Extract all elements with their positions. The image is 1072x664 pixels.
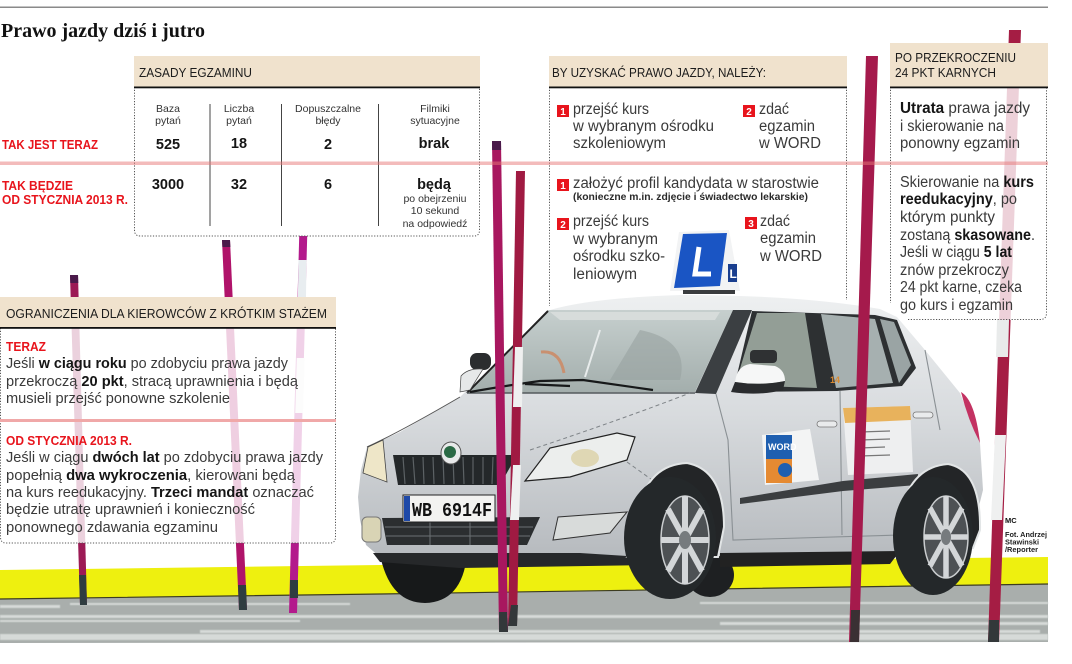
penalty text now: i skierowanie na — [900, 118, 1004, 135]
car: front wheel — [624, 463, 724, 599]
step 1 future: 1 — [560, 181, 566, 192]
limits header — [0, 297, 336, 327]
photo: road surface — [0, 584, 1048, 643]
photo credits: /Reporter — [1005, 545, 1038, 554]
limits future: na kurs reedukacyjny. Trzeci mandat oznaczać — [6, 484, 314, 501]
pole 6 — [849, 56, 878, 642]
step 2 future: 2 — [560, 220, 566, 231]
car: far front tyre — [380, 555, 467, 603]
step 2 future: leniowym — [573, 266, 637, 283]
pole 4 — [492, 141, 508, 632]
step 1 now: 1 — [560, 107, 566, 118]
panel: how to get a licence — [549, 56, 847, 306]
penalty text future: zostaną skasowane. — [900, 227, 1035, 244]
column headings: sytuacyjne — [410, 115, 460, 127]
current values — [156, 136, 450, 153]
column headings: Dopuszczalne — [295, 103, 361, 115]
panel: after exceeding 24 points — [890, 43, 1048, 320]
car: door panel lines — [716, 350, 940, 540]
step 2 future: przejść kurs — [573, 213, 649, 230]
step 2 future: w wybranym — [572, 231, 658, 248]
penalty text future: go kurs i egzamin — [900, 297, 1013, 314]
column headings — [155, 103, 460, 127]
car: tail light — [961, 392, 980, 443]
penalty text now — [900, 100, 1030, 152]
panel: exam rules — [134, 56, 480, 236]
future values: 32 — [231, 177, 247, 193]
penalty text future: znów przekroczy — [900, 262, 1009, 279]
penalty header — [890, 43, 1048, 87]
exam rules title: ZASADY EGZAMINU — [139, 65, 252, 80]
car: side window frame — [733, 311, 916, 392]
car: fog lights — [553, 512, 627, 540]
future values — [152, 177, 452, 193]
photo credits: Fot. Andrzej — [1005, 530, 1047, 539]
step 1 now: szkoleniowym — [573, 135, 666, 152]
limits future: Jeśli w ciągu dwóch lat po zdobyciu prawa jazdy — [6, 449, 323, 466]
column dividers — [210, 104, 378, 226]
car: underbody shadow — [373, 553, 650, 568]
photo credits: Stawinski — [1005, 538, 1039, 546]
limits now: musieli przejść ponowne szkolenie — [6, 390, 230, 407]
penalty text future: Skierowanie na kurs — [900, 174, 1034, 191]
step 2 now: zdać — [759, 101, 789, 118]
learner L roof sign — [670, 230, 740, 294]
step 3 future: egzamin — [760, 230, 816, 247]
video note: na odpowiedź — [403, 218, 467, 230]
car: door sticker right — [843, 406, 913, 475]
title: Prawo jazdy dziś i jutro — [1, 20, 205, 42]
step 2 now: egzamin — [759, 118, 815, 135]
pole 3 — [289, 207, 308, 613]
penalty text now: Utrata prawa jazdy — [900, 100, 1030, 117]
penalty text future: 24 pkt karne, czeka — [900, 279, 1022, 296]
car: windscreen pillar — [695, 310, 752, 394]
column headings: błędy — [315, 115, 341, 127]
penalty text future: reedukacyjny, po — [900, 191, 1017, 208]
car: mirror and camera — [731, 350, 785, 394]
column headings: pytań — [226, 115, 252, 127]
photo credits: MC — [1005, 516, 1017, 525]
licence box — [550, 87, 846, 306]
current values: 2 — [324, 137, 332, 153]
step 3 future — [745, 213, 822, 265]
video note: 10 sekund — [411, 205, 459, 217]
step 2 now — [743, 101, 821, 152]
car: side windows: 14 — [830, 375, 840, 385]
penalty text now: ponowny egzamin — [900, 135, 1020, 152]
step 1 now: przejść kurs — [573, 101, 649, 118]
panel: novice driver limits — [0, 297, 336, 543]
car: side rubbing strip — [740, 474, 918, 504]
penalty text future — [900, 174, 1035, 314]
limits now: Jeśli w ciągu roku po zdobyciu prawa jazdy — [6, 355, 288, 372]
step 2 future — [557, 213, 665, 283]
car: door sticker left: WORD — [768, 442, 797, 452]
step 3 future: 3 — [748, 219, 754, 230]
car: side windows — [735, 313, 911, 388]
column headings: Liczba — [224, 103, 254, 115]
row label: future: TAK BĘDZIE — [2, 178, 73, 193]
current values: brak — [419, 136, 450, 152]
car: licence plate — [403, 495, 495, 522]
limits future: popełnią dwa wykroczenia, kierowani będą — [6, 467, 296, 484]
step 1 future — [557, 175, 819, 203]
limits future: będzie utratę uprawnień i konieczność — [6, 501, 255, 518]
future values: 3000 — [152, 177, 184, 193]
pole 5 — [508, 171, 525, 626]
limits title: OGRANICZENIA DLA KIEROWCÓW Z KRÓTKIM STAŻEM — [6, 306, 327, 321]
column headings: pytań — [155, 115, 181, 127]
car: rear wheel — [893, 464, 980, 595]
car: licence plate: WB 6914F — [412, 500, 492, 522]
car: body shell — [358, 295, 983, 559]
step 1 now — [557, 101, 714, 152]
car: grille — [393, 455, 517, 485]
video note — [403, 193, 467, 230]
step 3 future: zdać — [760, 213, 790, 230]
licence title: BY UZYSKAĆ PRAWO JAZDY, NALEŻY: — [552, 65, 766, 80]
column headings: Filmiki — [420, 103, 450, 115]
limits box — [0, 328, 336, 543]
car: door sticker left — [762, 429, 819, 485]
step 2 now: w WORD — [758, 135, 821, 152]
exam rules header — [134, 56, 480, 87]
penalty title: 24 PKT KARNYCH — [895, 65, 996, 80]
limits now — [6, 339, 299, 407]
row label: now: TAK JEST TERAZ — [2, 137, 98, 152]
future values: 6 — [324, 177, 332, 193]
limits future: ponownego zdawania egzaminu — [6, 519, 218, 536]
limits future: OD STYCZNIA 2013 R. — [6, 433, 132, 448]
step 1 future: (konieczne m.in. zdjęcie i świadectwo lekarskie) — [573, 192, 808, 203]
car: left wing mirror — [460, 353, 491, 392]
pole 7 — [988, 30, 1021, 642]
photo credits — [1005, 516, 1047, 554]
row label: future — [2, 178, 128, 207]
pole 2 — [222, 240, 247, 610]
car: door handles — [817, 412, 933, 427]
licence header — [549, 56, 847, 87]
pink divider line — [0, 162, 1048, 165]
car: windscreen reflections — [541, 312, 720, 380]
car: bonnet line — [530, 393, 690, 482]
car: windscreen frame — [467, 311, 548, 393]
row label: future: OD STYCZNIA 2013 R. — [2, 192, 128, 207]
pole 1 — [70, 275, 87, 605]
limits now: TERAZ — [6, 339, 46, 354]
car: badge — [441, 442, 461, 464]
photo: car — [358, 295, 983, 603]
penalty box — [890, 87, 1046, 320]
limits now: przekroczą 20 pkt, stracą uprawnienia i będą — [6, 373, 299, 390]
current values: 525 — [156, 137, 180, 153]
penalty title — [895, 50, 1016, 80]
learner L roof sign: L — [730, 267, 737, 281]
video note: po obejrzeniu — [403, 193, 467, 205]
car: far rear tyre — [686, 553, 734, 597]
step 1 future: założyć profil kandydata w starostwie — [573, 175, 819, 192]
car: wipers — [470, 380, 653, 392]
photo: yellow kerb — [0, 557, 1048, 599]
column headings: Baza — [156, 103, 180, 115]
car: windscreen — [467, 310, 733, 393]
step 1 now: w wybranym ośrodku — [572, 118, 714, 135]
penalty text future: którym punkty — [900, 209, 995, 226]
car: left headlight — [363, 440, 387, 482]
car: lower grille — [382, 517, 540, 545]
limits separator — [0, 419, 336, 422]
future values: będą — [417, 177, 452, 193]
penalty title: PO PRZEKROCZENIU — [895, 50, 1016, 65]
limits future — [6, 433, 323, 536]
step 2 future: ośrodku szko- — [573, 248, 665, 265]
step 3 future: w WORD — [759, 248, 822, 265]
exam rules box — [134, 87, 480, 236]
step 2 now: 2 — [746, 107, 752, 118]
top rule — [0, 6, 1048, 8]
car: right headlight — [525, 433, 635, 481]
penalty text future: Jeśli w ciągu 5 lat — [900, 244, 1012, 261]
current values: 18 — [231, 136, 247, 152]
